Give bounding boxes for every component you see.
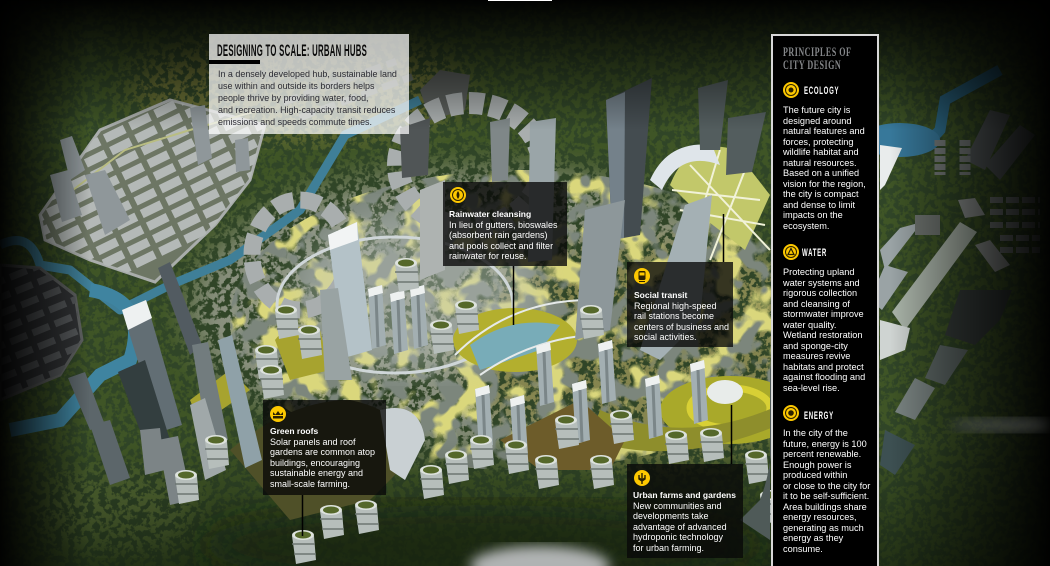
- energy text: future, energy is 100: [783, 438, 867, 448]
- water text: stormwater improve: [783, 309, 864, 319]
- right side towers: [870, 110, 1040, 475]
- icon: ecology: [783, 82, 799, 98]
- urban farms text: advantage of advanced: [633, 522, 727, 532]
- intro text: use within and outside its borders helps: [218, 81, 374, 91]
- callout: green roofs: [263, 400, 386, 495]
- rainwater text: In lieu of gutters, bioswales: [449, 220, 558, 230]
- green roofs text: Solar panels and roof: [270, 436, 356, 446]
- energy text: Area buildings share: [783, 502, 867, 512]
- ecology text: Based on a unified: [783, 168, 859, 178]
- ecology text: natural resources.: [783, 158, 857, 168]
- heading: principles: [783, 44, 851, 72]
- forest tone patches: [130, 40, 470, 140]
- icon: water: [783, 244, 799, 260]
- callout: rainwater cleansing: [443, 182, 567, 266]
- water text: water quality.: [783, 320, 836, 330]
- podium buildings with green roofs: [175, 258, 784, 564]
- energy text: produced within: [783, 470, 847, 480]
- energy text: energy resources,: [783, 512, 857, 522]
- green roofs text: Green roofs: [270, 426, 318, 436]
- main towers: [68, 222, 428, 505]
- water text: and cleansing of: [783, 298, 850, 308]
- rivers: [0, 100, 420, 310]
- dome and lattice: [650, 144, 770, 260]
- ecology text: designed around: [783, 116, 851, 126]
- pale towers: [50, 105, 250, 235]
- icon: wheat: [634, 470, 650, 486]
- label: energy: ENERGY: [804, 410, 834, 422]
- rainwater text: and pools collect and filter: [449, 240, 553, 250]
- icon: energy: [783, 405, 799, 421]
- energy text: or close to the city for: [783, 480, 870, 490]
- energy text: consume.: [783, 544, 823, 554]
- energy text: percent renewable.: [783, 449, 861, 459]
- label: water: WATER: [802, 247, 827, 259]
- rainwater text: (absorbent rain gardens): [449, 230, 548, 240]
- top tab: [488, 0, 552, 1]
- bottom forest shade: [0, 440, 1050, 566]
- water text: sea-level rise.: [783, 382, 840, 392]
- urban farms text: Urban farms and gardens: [633, 490, 736, 500]
- vignette and haze: [0, 0, 1050, 130]
- social transit text: social activities.: [634, 332, 697, 342]
- ecology text: The future city is: [783, 105, 850, 115]
- intro text: [218, 69, 397, 127]
- rainwater text: [449, 209, 558, 261]
- ecology text: wildlife habitat and: [783, 147, 859, 157]
- ecology text: and dense to limit: [783, 200, 855, 210]
- central towers: [400, 78, 766, 459]
- water text: [783, 267, 865, 392]
- callout: social transit: [627, 262, 733, 347]
- green roofs text: sustainable energy and: [270, 468, 363, 478]
- energy text: generating as much: [783, 522, 864, 532]
- water text: Protecting upland: [783, 267, 855, 277]
- water text: habitats and protect: [783, 362, 864, 372]
- icon: transit: [634, 268, 650, 284]
- district: upper centre: [252, 58, 542, 373]
- water text: water systems and: [783, 278, 860, 288]
- panel: principles of city design: [771, 34, 879, 566]
- energy text: energy as they: [783, 533, 843, 543]
- heading: principles: PRINCIPLES OF: [783, 44, 851, 59]
- rainwater text: Rainwater cleansing: [449, 209, 531, 219]
- central city base: [190, 170, 770, 450]
- heading: principles: CITY DESIGN: [783, 56, 841, 72]
- ecology text: forces, protecting: [783, 136, 853, 146]
- water text: rigorous collection: [783, 288, 857, 298]
- district: lower left dark: [8, 264, 84, 398]
- energy text: [783, 428, 870, 554]
- icon: green roofs: [270, 406, 286, 422]
- water text: and sponge-city: [783, 340, 848, 350]
- energy text: it to be self-sufficient.: [783, 491, 869, 501]
- title rule: [209, 60, 260, 64]
- district: upper left ring: [38, 98, 267, 284]
- green roofs text: buildings, encouraging: [270, 458, 360, 468]
- icon: rainwater: [450, 187, 466, 203]
- ecology text: vision for the region,: [783, 178, 866, 188]
- urban farms text: [633, 490, 736, 553]
- leader lines: [302, 214, 732, 536]
- ecology text: [783, 105, 866, 231]
- intro text: people thrive by providing water, food,: [218, 93, 369, 103]
- ecology text: ecosystem.: [783, 220, 829, 230]
- panel: designing to scale: [209, 34, 409, 134]
- urban farms text: developments take: [633, 511, 709, 521]
- urban farms text: for urban farming.: [633, 542, 704, 552]
- intro text: emissions and speeds commute times.: [218, 117, 372, 127]
- callout: urban farms: [627, 464, 743, 558]
- ecology text: natural features and: [783, 126, 865, 136]
- intro text: In a densely developed hub, sustainable land: [218, 69, 397, 79]
- rainwater text: rainwater for reuse.: [449, 251, 527, 261]
- social transit text: rail stations become: [634, 311, 714, 321]
- water text: measures revive: [783, 351, 850, 361]
- urban farms text: hydroponic technology: [633, 532, 723, 542]
- energy text: Enough power is: [783, 460, 851, 470]
- green roofs text: small-scale farming.: [270, 478, 350, 488]
- urban farms text: New communities and: [633, 500, 722, 510]
- social transit text: Social transit: [634, 290, 687, 300]
- social transit text: [634, 290, 729, 342]
- water text: Wetland restoration: [783, 330, 862, 340]
- low mid buildings: [380, 360, 773, 540]
- ecology text: the city is compact: [783, 189, 859, 199]
- energy text: In the city of the: [783, 428, 848, 438]
- label: ecology: ECOLOGY: [804, 85, 839, 97]
- heading: designing to scale: DESIGNING TO SCALE: URBAN HUBS: [217, 42, 367, 60]
- ecology text: impacts on the: [783, 210, 843, 220]
- green roofs text: [270, 426, 375, 489]
- social transit text: centers of business and: [634, 322, 729, 332]
- water text: against flooding and: [783, 372, 865, 382]
- yellow landscape: [190, 300, 800, 520]
- intro text: and recreation. High-capacity transit reduces: [218, 105, 395, 115]
- social transit text: Regional high-speed: [634, 300, 717, 310]
- green roofs text: gardens are common atop: [270, 447, 375, 457]
